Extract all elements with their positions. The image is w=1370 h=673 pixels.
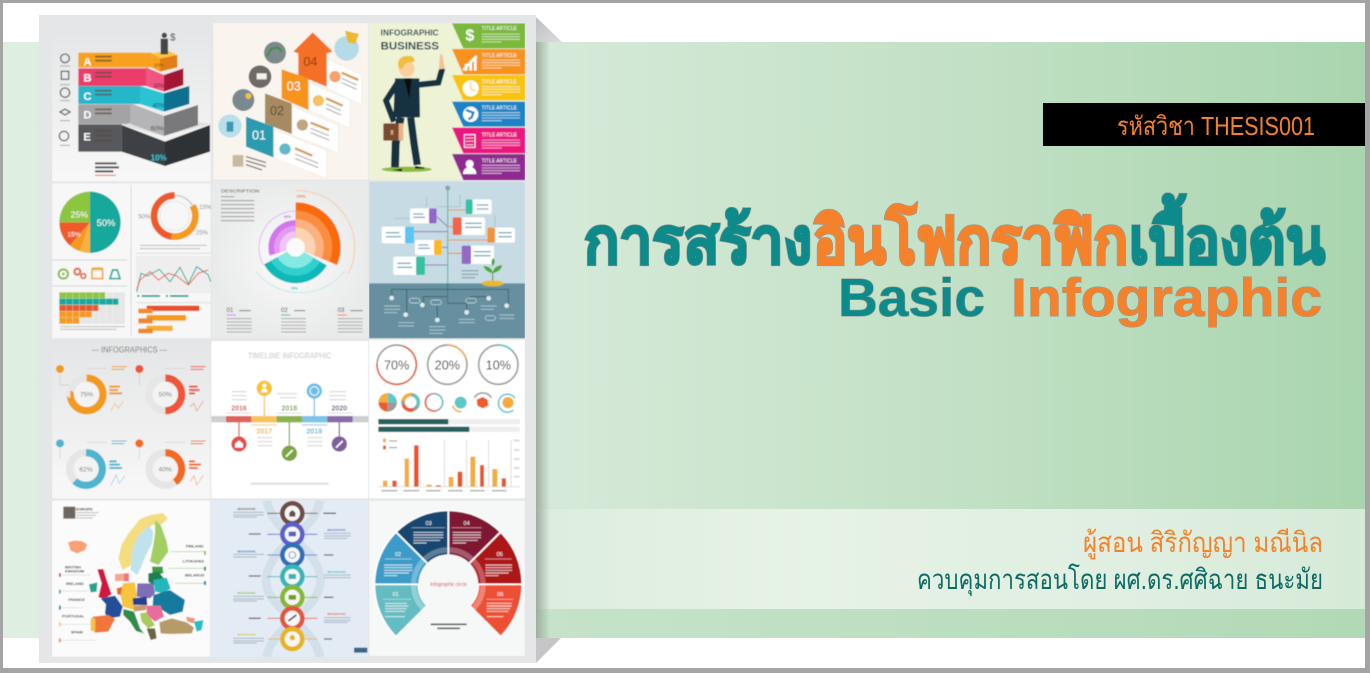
thumbnail: pie and bars dashboard: 50% <box>97 218 115 228</box>
thumbnail: stepped pyramid infographic: C <box>83 91 92 103</box>
thumbnail: stepped pyramid infographic: D <box>83 109 92 121</box>
thumbnail: orange arrow steps: 04 <box>303 55 317 69</box>
thumbnail: stepped pyramid infographic: 10% <box>154 63 165 69</box>
thumbnail: vertical circle flow <box>211 501 368 657</box>
thumbnail: vertical circle flow: INFOGRAPHIC <box>237 591 256 595</box>
thumbnail: stepped pyramid infographic: A <box>83 57 92 69</box>
thumbnail: vertical circle flow: INFOGRAPHIC <box>327 612 346 616</box>
thumbnail: vertical circle flow: INFOGRAPHIC <box>237 507 256 511</box>
thumbnail: stepped pyramid infographic: B <box>83 73 92 85</box>
thumbnail: orange arrow steps <box>213 23 368 180</box>
thumbnail: stepped pyramid infographic: 10% <box>151 154 167 163</box>
thumbnail: radial wedge chart: 02 <box>281 308 288 314</box>
thumbnail: percentage rings and bars <box>369 339 525 498</box>
thumbnail: radial wedge chart: 100% <box>296 194 306 198</box>
thumbnail: Europe map: BRITISH <box>65 564 81 569</box>
book top bevel <box>536 17 562 42</box>
lower green strip <box>537 609 1365 638</box>
thumbnail: radial wedge chart: 01 <box>227 308 234 314</box>
thumbnail: orange arrow steps: 01 <box>252 128 266 142</box>
thumbnail: percentage rings and bars: 50% <box>514 439 520 443</box>
course code bar: รหัสวิชา THESIS001 <box>1117 111 1315 141</box>
thumbnail: vertical circle flow: INFOGRAPHIC <box>327 528 346 532</box>
thumbnail: four donut gauges <box>52 340 210 498</box>
main title thai <box>584 194 1325 277</box>
thumbnail: business man with ribbons: INFOGRAPHIC <box>381 28 439 37</box>
thumbnail: stepped pyramid infographic: 30% <box>153 83 164 89</box>
thumbnail: percentage rings and bars: 20% <box>514 466 520 470</box>
thumbnail: semi circular six segment chart: 06 <box>497 592 503 598</box>
thumbnail: four donut gauges: 50% <box>159 392 172 399</box>
thumbnail: Europe map <box>52 501 210 657</box>
thumbnail: timeline infographic: 2020 <box>332 405 347 412</box>
thumbnail: semi circular six segment chart: 01 <box>393 592 399 598</box>
thumbnail: pie and bars dashboard: 15% <box>67 232 81 239</box>
thumbnail: business man with ribbons: TITLE ARTICLE <box>482 106 517 112</box>
thumbnail: timeline infographic <box>211 341 368 498</box>
thumbnail: semi circular six segment chart: 02 <box>395 552 401 558</box>
thumbnail: stepped pyramid infographic: 60% <box>151 126 164 133</box>
thumbnail: four donut gauges: 75% <box>80 392 93 399</box>
thumbnail: percentage rings and bars: 10% <box>514 475 520 479</box>
thumbnail: business man with ribbons: BUSINESS <box>381 40 439 52</box>
thumbnails row 1 and 2, left columns <box>52 23 368 338</box>
thumbnail: business man with ribbons: TITLE ARTICLE <box>482 79 517 85</box>
main title thai: อินโฟกราฟิก <box>813 203 1128 277</box>
thumbnail: Europe map: BELARUS <box>185 573 205 578</box>
thumbnail: semi circular six segment chart: 03 <box>426 521 432 527</box>
thumbnail: percentage rings and bars: 30% <box>514 457 520 461</box>
thumbnail: radial wedge chart <box>212 182 368 338</box>
thumbnail: pie and bars dashboard: 50% <box>138 215 151 221</box>
thumbnail: semi circular six segment chart <box>369 501 525 656</box>
thumbnail: Europe map: SPAIN <box>71 630 83 635</box>
thumbnail: percentage rings and bars: 70% <box>384 358 409 372</box>
thumbnail: Europe map: KINGDOM <box>65 568 85 573</box>
thumbnail: percentage rings and bars: 20% <box>435 358 460 372</box>
thumbnail: pie and bars dashboard <box>52 183 212 338</box>
thumbnail: semi circular six segment chart: 05 <box>497 552 503 558</box>
thumbnail: business man with ribbons: TITLE ARTICLE <box>482 158 517 164</box>
thumbnails row 3 and 4, left columns <box>52 340 368 657</box>
thumbnail: business man with ribbons: TITLE ARTICLE <box>482 133 517 139</box>
thumbnail: Europe map: FINLAND <box>186 543 204 548</box>
lower light band <box>537 509 1365 609</box>
thumbnail: stepped pyramid infographic: E <box>83 132 91 144</box>
thumbnail: business man with ribbons: TITLE ARTICLE <box>482 53 517 59</box>
thumbnail: timeline infographic: TIMELINE INFOGRAPHIC <box>248 350 332 360</box>
thumbnails row 3 and 4, right column <box>369 339 525 656</box>
thumbnail: vertical circle flow: INFOGRAPHIC <box>237 633 256 637</box>
thumbnail: radial wedge chart: 60% <box>284 215 292 219</box>
thumbnail: pie and bars dashboard: 25% <box>71 209 88 219</box>
main title english: Infographic <box>1011 268 1322 328</box>
thumbnail: vertical circle flow: INFOGRAPHIC <box>237 549 256 553</box>
thumbnail: four donut gauges: 40% <box>159 466 172 473</box>
main title thai: การสร้าง <box>584 205 812 277</box>
thumbnail: four donut gauges: 62% <box>79 466 93 473</box>
instructor name: ผู้สอน สิริกัญญา มณีนิล <box>1083 527 1323 560</box>
thumbnails row 1 and 2, right column <box>369 23 525 338</box>
thumbnail: business man with ribbons: $ <box>465 28 474 45</box>
thumbnail: four donut gauges: — INFOGRAPHICS — <box>92 345 167 354</box>
main title english <box>838 268 1322 328</box>
thumbnail: Europe map: IRELAND <box>66 581 84 586</box>
thumbnail: timeline infographic: 2016 <box>231 405 247 412</box>
thumbnail: timeline infographic: 2017 <box>257 428 272 435</box>
thumbnail: percentage rings and bars: 10% <box>486 358 511 372</box>
course code bar <box>1043 103 1365 146</box>
thumbnail: semi circular six segment chart: Infographic circle <box>430 582 467 588</box>
book page <box>39 15 536 663</box>
book cover shadow <box>536 42 550 638</box>
main title english: Basic <box>838 268 985 328</box>
thumbnail: Europe map: PORTUGAL <box>62 614 85 619</box>
thumbnail: timeline infographic: 2019 <box>307 428 322 435</box>
thumbnail: business man with ribbons: TITLE ARTICLE <box>482 26 517 32</box>
thumbnail: stepped pyramid infographic <box>52 23 211 181</box>
thumbnail: pie and bars dashboard: 15% <box>199 205 212 211</box>
thumbnail: stepped pyramid infographic: $ <box>170 33 176 44</box>
thumbnail: radial wedge chart: 03 <box>338 308 345 314</box>
thumbnail: radial wedge chart: 78% <box>291 286 299 290</box>
thumbnail: semi circular six segment chart: 04 <box>464 521 470 527</box>
thumbnail: Europe map: EUROPE <box>76 506 93 511</box>
thumbnail: Europe map: FRANCE <box>68 597 85 602</box>
thumbnail: vertical circle flow: INFOGRAPHIC <box>327 570 346 574</box>
main title thai: เบื้องต้น <box>1129 194 1325 277</box>
thumbnail: business man with ribbons <box>369 23 525 180</box>
book bottom bevel <box>536 638 561 663</box>
thumbnail: Europe map: LITHUANIA <box>183 558 204 563</box>
thumbnail: pie and bars dashboard: 25% <box>196 230 209 236</box>
thumbnail: orange arrow steps: 02 <box>270 104 284 118</box>
thumbnail: tree diagram with cards <box>369 182 525 338</box>
thumbnail: orange arrow steps: 03 <box>287 80 301 94</box>
thumbnail: timeline infographic: 2018 <box>282 405 297 412</box>
thumbnail: radial wedge chart: DESCRIPTION <box>221 189 259 194</box>
thumbnail: percentage rings and bars: 40% <box>514 448 520 452</box>
thumbnail: stepped pyramid infographic: 40% <box>153 103 165 109</box>
